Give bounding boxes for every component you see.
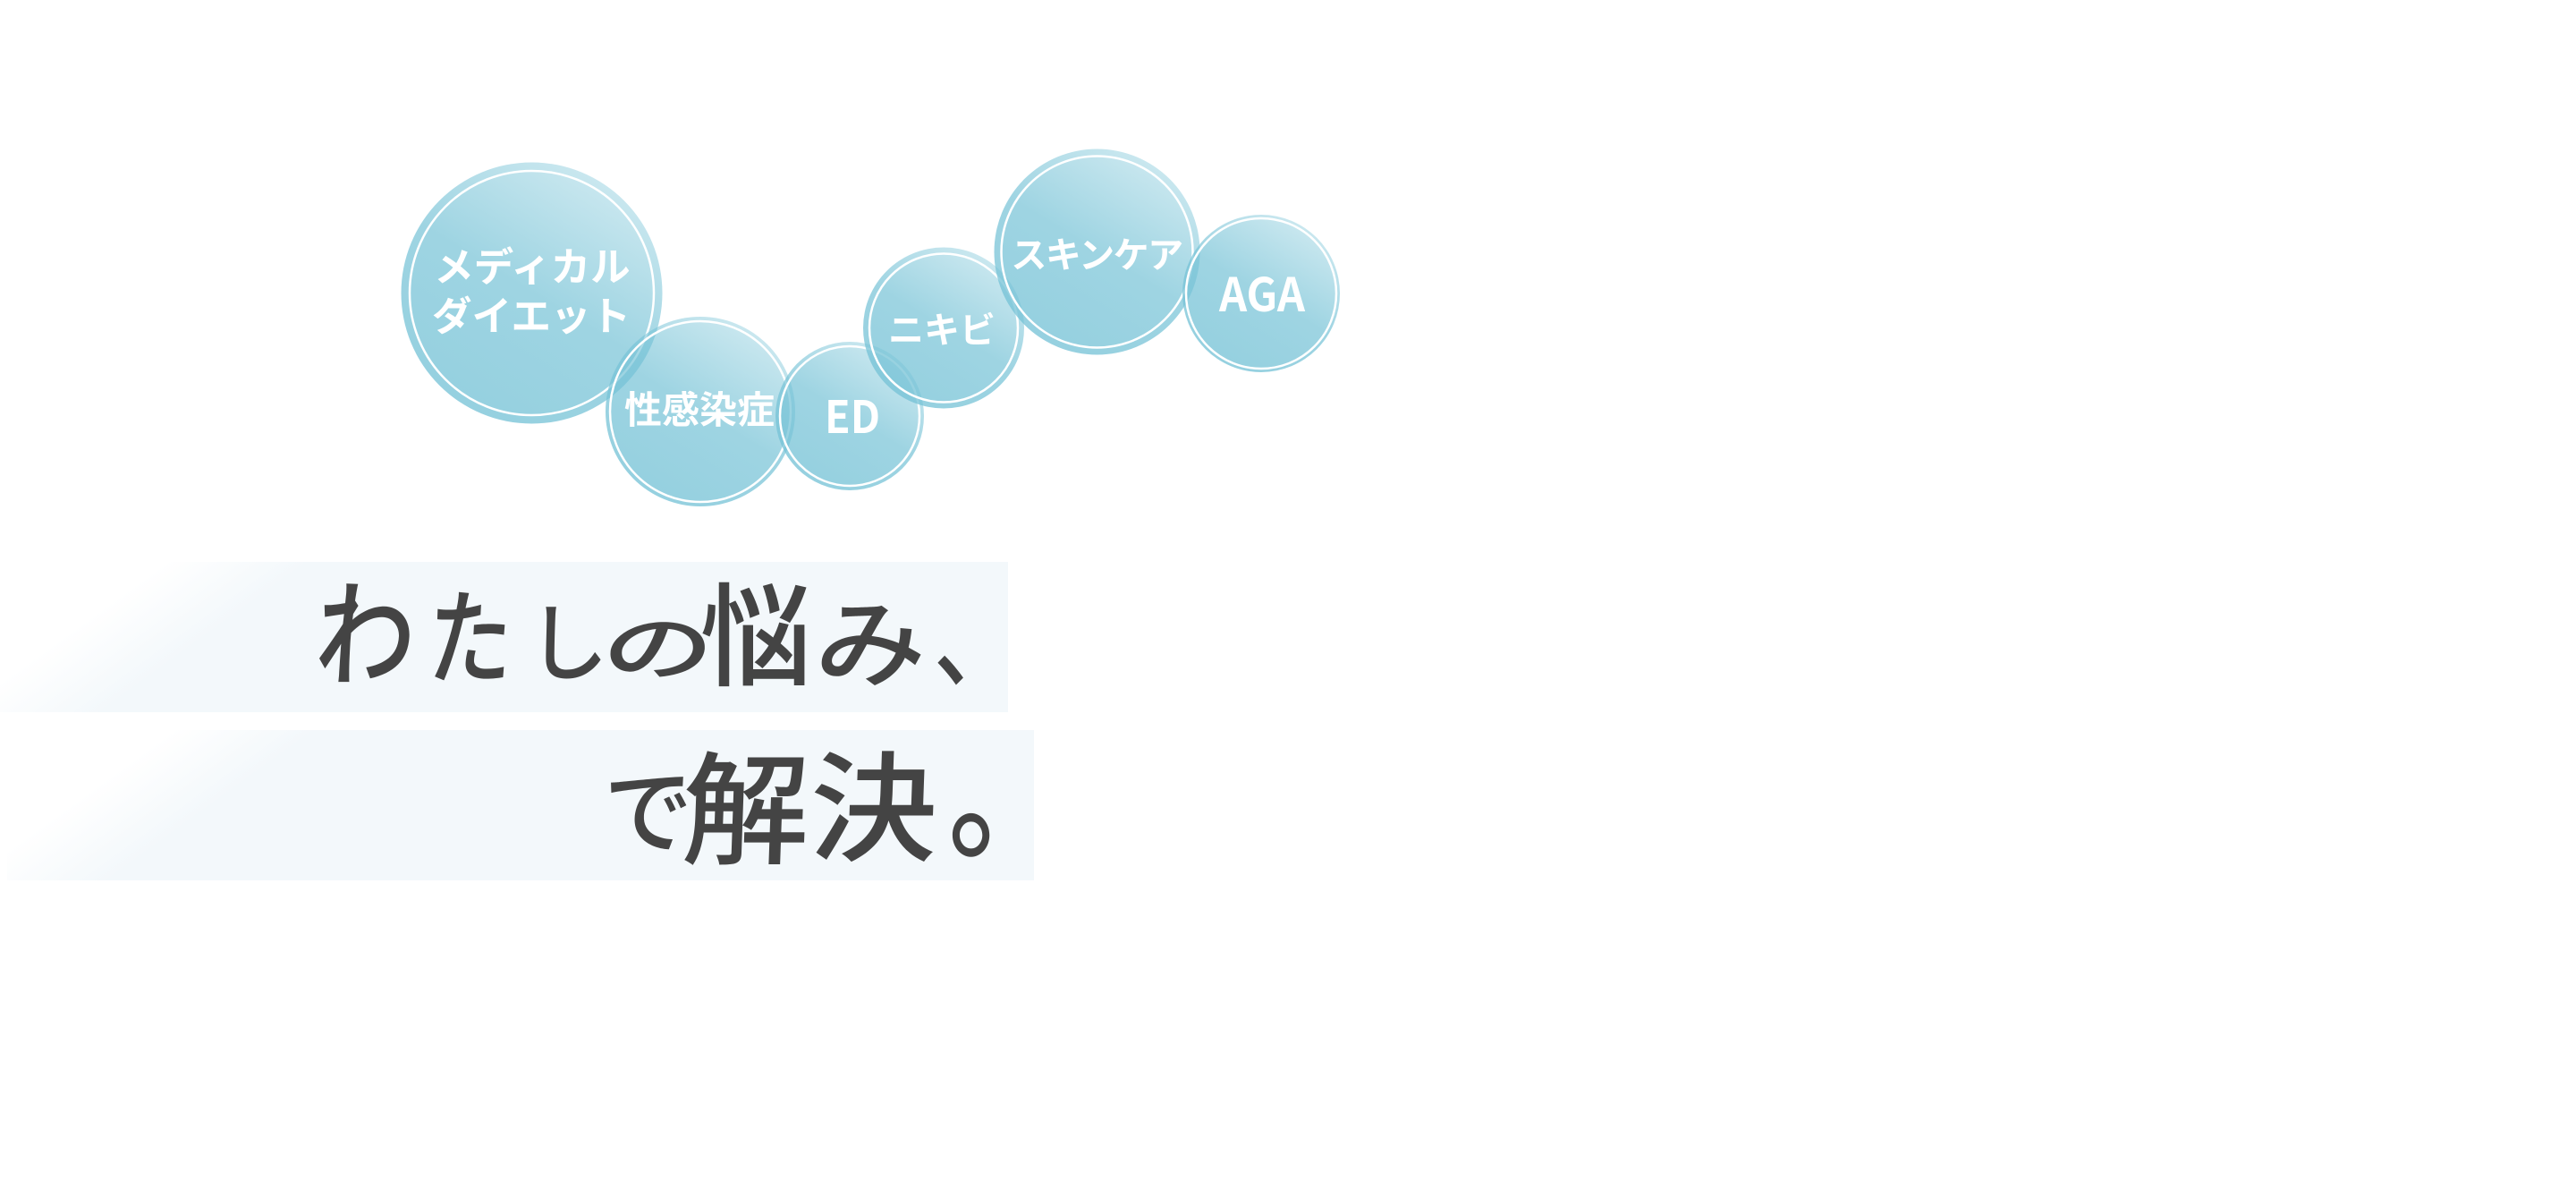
bubble: AGA: AGA: [1218, 258, 1306, 325]
bubble: ED: [775, 342, 924, 490]
heading line 2: で解決。: 決: [807, 713, 941, 886]
heading line 1: わたしの悩み、: み: [812, 567, 930, 708]
bubble: ニキビ: ニキビ: [888, 302, 996, 353]
bubble: AGA: [1182, 215, 1340, 372]
bubble: ED: ED: [825, 382, 880, 446]
heading line 1: わたしの悩み、: [311, 541, 1018, 710]
heading line 2: で解決。: 解: [680, 713, 813, 890]
heading line 1: わたしの悩み、: の: [597, 591, 720, 695]
bubble: スキンケア: スキンケア: [1011, 226, 1182, 278]
heading line 2: で解決。: 。: [948, 685, 1066, 888]
bubble: メディカルダイエット: メディカル: [434, 234, 631, 293]
bubble: メディカルダイエット: [401, 163, 662, 424]
heading line 2: で解決。: [599, 685, 1066, 890]
bubble: 性感染症: 性感染症: [624, 380, 775, 435]
bubble: メディカルダイエット: ダイエット: [432, 284, 631, 342]
banner: second headline background: [7, 730, 1034, 880]
heading line 1: わたしの悩み、: 悩: [699, 548, 812, 709]
heading line 1: わたしの悩み、: わ: [311, 541, 420, 710]
heading line 1: わたしの悩み、: し: [528, 575, 608, 699]
heading line 1: わたしの悩み、: た: [424, 554, 517, 706]
bubble: 性感染症: [606, 317, 795, 506]
heading line 1: わたしの悩み、: 、: [934, 563, 1018, 708]
bubble: スキンケア: [995, 149, 1200, 354]
banner: first headline background: [0, 562, 1008, 712]
bubble: ニキビ: [863, 247, 1024, 408]
heading line 2: で解決。: で: [599, 736, 696, 873]
